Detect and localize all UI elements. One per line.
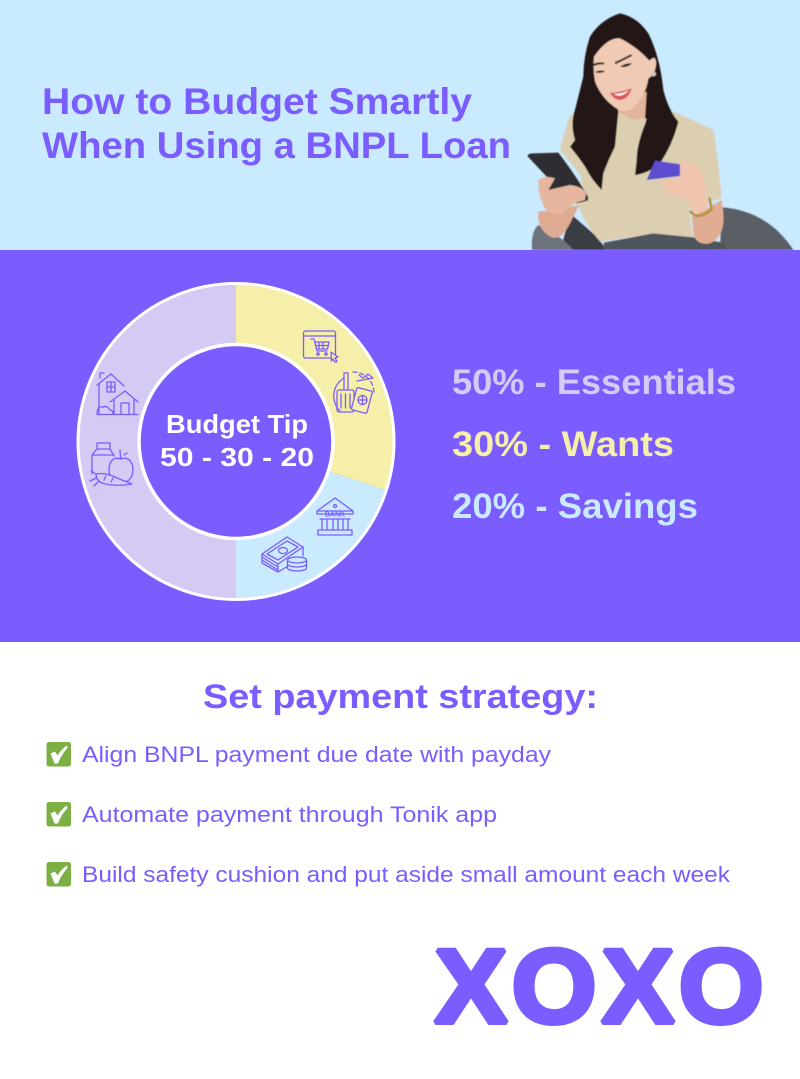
icon: groceries xyxy=(90,443,133,486)
list item: automate payment: Automate payment through Tonik app xyxy=(82,802,497,827)
segment: savings 20% xyxy=(236,472,385,598)
legend: savings: 20% - Savings xyxy=(452,487,698,526)
icon: houses xyxy=(97,373,138,414)
icon: online shopping xyxy=(304,331,338,362)
icon: check mark xyxy=(46,802,71,826)
panel: payment strategy xyxy=(46,678,731,887)
icon: luggage and passport xyxy=(334,372,374,414)
icon: cash and coins xyxy=(262,537,306,572)
sign-off: XOXO: XOXO xyxy=(435,927,764,1045)
heading: Set payment strategy: xyxy=(203,678,598,716)
donut chart xyxy=(78,284,394,600)
legend xyxy=(452,363,736,526)
segment: essentials 50% xyxy=(79,284,236,598)
list item: safety cushion: Build safety cushion and put aside small amount each week xyxy=(82,862,731,887)
title: How to Budget Smartly xyxy=(42,81,472,122)
panel: header xyxy=(0,0,800,250)
donut centre label: 50 - 30 - 20 xyxy=(160,442,314,472)
icon: bank: BANK xyxy=(325,512,345,518)
legend: essentials: 50% - Essentials xyxy=(452,363,736,402)
title: When Using a BNPL Loan xyxy=(42,125,511,166)
photo: woman with phone and card xyxy=(527,13,793,250)
segment: wants 30% xyxy=(236,284,393,490)
donut centre label xyxy=(160,409,314,472)
icon: bank xyxy=(317,498,353,535)
list item: align due date: Align BNPL payment due date with payday xyxy=(82,742,551,767)
legend: wants: 30% - Wants xyxy=(452,425,674,464)
panel: budget rule xyxy=(0,250,800,642)
donut centre label: Budget Tip xyxy=(166,409,308,439)
icon: check mark xyxy=(46,742,71,766)
title xyxy=(42,81,511,166)
icon: check mark xyxy=(46,862,71,886)
